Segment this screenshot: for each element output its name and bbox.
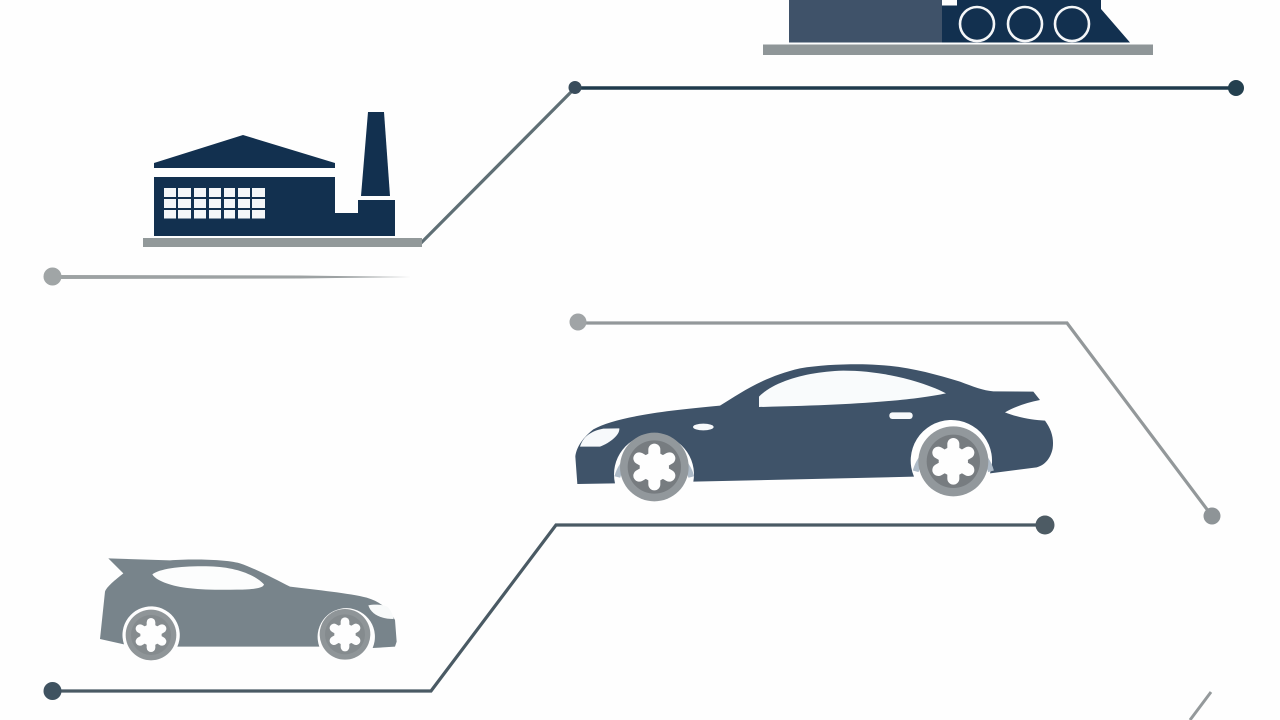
front wheel [126, 610, 176, 660]
front wheel [617, 433, 691, 501]
connector: lower car line [44, 516, 1054, 700]
icon: ship hull on platform [763, 0, 1153, 55]
icon: factory [143, 112, 422, 247]
connector: factory lower line [44, 268, 411, 286]
rear wheel [320, 609, 370, 660]
connector: upper car line [570, 314, 1220, 524]
connector: bottom right line stub [1190, 692, 1211, 720]
rear wheel [916, 426, 991, 496]
icon: sedan car [575, 364, 1053, 501]
connector: ship line with end dots [420, 80, 1244, 244]
icon: hatchback car [100, 558, 397, 660]
